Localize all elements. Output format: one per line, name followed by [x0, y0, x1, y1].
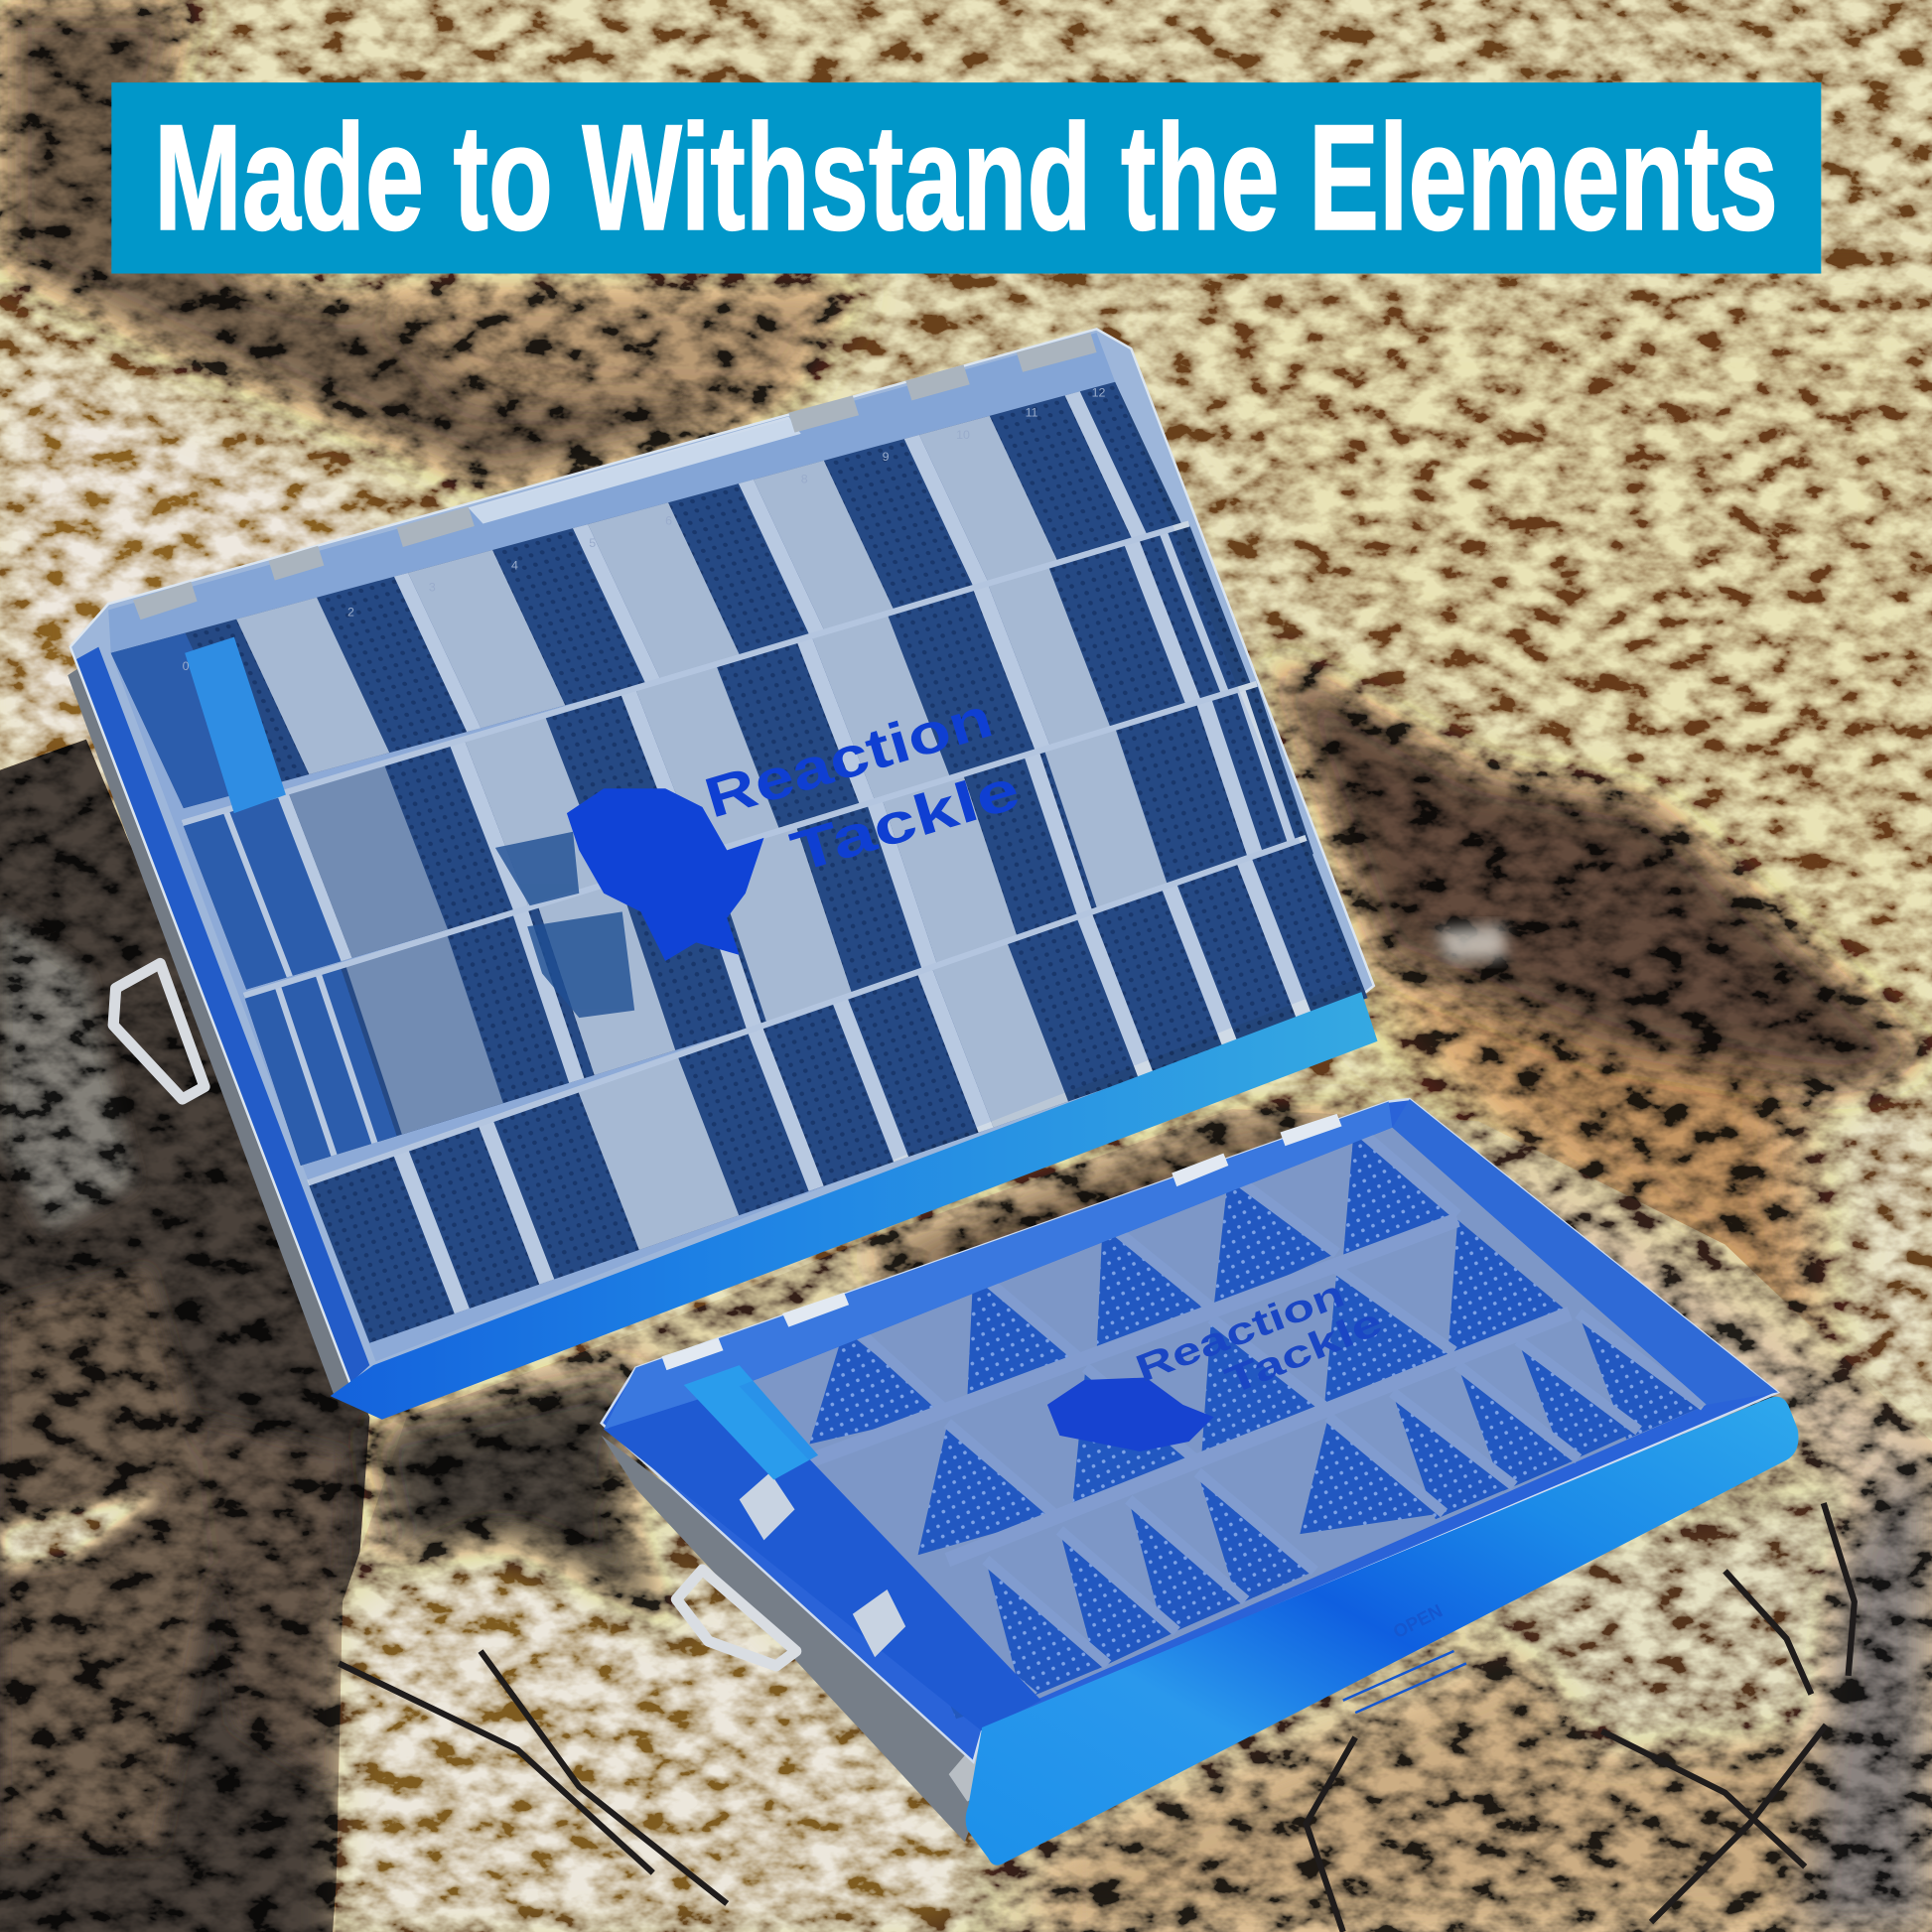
small box: column dividers — [844, 1126, 1704, 1697]
small box: perforated walls row 1 — [809, 1126, 1457, 1445]
large box: ruler numbers: 9 — [883, 450, 890, 464]
large box: brand name — [698, 686, 1027, 885]
large box: compartment row 1 — [111, 382, 1187, 808]
large box: ruler numbers: 4 — [511, 558, 518, 572]
small box: lid top band — [604, 1102, 1392, 1430]
small tackle box — [602, 1099, 1798, 1865]
large box: blue slider tab — [185, 637, 286, 813]
small box: clear lid tint — [740, 1128, 1707, 1701]
large box: ruler numbers — [183, 386, 1105, 673]
large box: ruler numbers: 5 — [589, 536, 596, 550]
small box: brand name: Reaction — [1130, 1273, 1350, 1391]
large box: side handle — [113, 964, 205, 1099]
large box: hinges — [133, 333, 1097, 620]
large tackle box — [68, 329, 1378, 1420]
large box: ruler numbers: 3 — [429, 581, 436, 595]
small box: brand name: Tackle — [1219, 1301, 1388, 1403]
large box: ruler numbers: 12 — [1092, 386, 1105, 400]
large box: ruler numbers: 0 — [183, 659, 190, 673]
large box: fish logo — [567, 788, 763, 961]
small box: perforated walls row 2 — [918, 1220, 1570, 1555]
large box: long row dividers — [183, 523, 1307, 1182]
large box: logo shadow — [495, 832, 634, 1018]
small box: grey base — [602, 1436, 986, 1842]
large box: brand name: Reaction — [698, 686, 1000, 831]
large box: ruler numbers: 10 — [956, 428, 970, 442]
large box: brand name: Tackle — [784, 758, 1027, 885]
large box: compartment row 4 — [308, 838, 1368, 1343]
small box: lid right band — [1392, 1099, 1778, 1405]
large box: ruler numbers: 8 — [801, 472, 808, 485]
large box: lid frame — [70, 329, 1374, 1386]
small box: hinges — [661, 1114, 1342, 1370]
small box: lid frame — [602, 1099, 1778, 1762]
small box: long dividers — [808, 1220, 1570, 1560]
title banner — [111, 82, 1821, 274]
large box: blue latch strip — [331, 992, 1378, 1420]
small box: compartment floor — [740, 1128, 1707, 1701]
small box: open label — [1343, 1600, 1466, 1713]
large box: ruler numbers: 11 — [1026, 405, 1038, 419]
large box: clear lid tint — [111, 382, 1355, 1361]
large box: compartment row 2 — [183, 523, 1253, 990]
small box: open label: OPEN — [1390, 1600, 1446, 1642]
small box: blue latch strip — [966, 1397, 1798, 1865]
small box: blue slider tab — [684, 1365, 818, 1480]
small box: fish logo — [1047, 1378, 1213, 1451]
small box: brand name — [1130, 1273, 1388, 1403]
large box: grey base edge — [68, 659, 359, 1399]
small box: side handle — [676, 1570, 796, 1666]
small box: lid left band — [604, 1386, 1041, 1731]
large box: ruler numbers: 2 — [347, 606, 354, 620]
small box: perforated walls row 3 — [913, 1313, 1704, 1719]
large box: compartment row 3 — [244, 684, 1313, 1166]
large box: ruler numbers: 6 — [665, 514, 672, 528]
